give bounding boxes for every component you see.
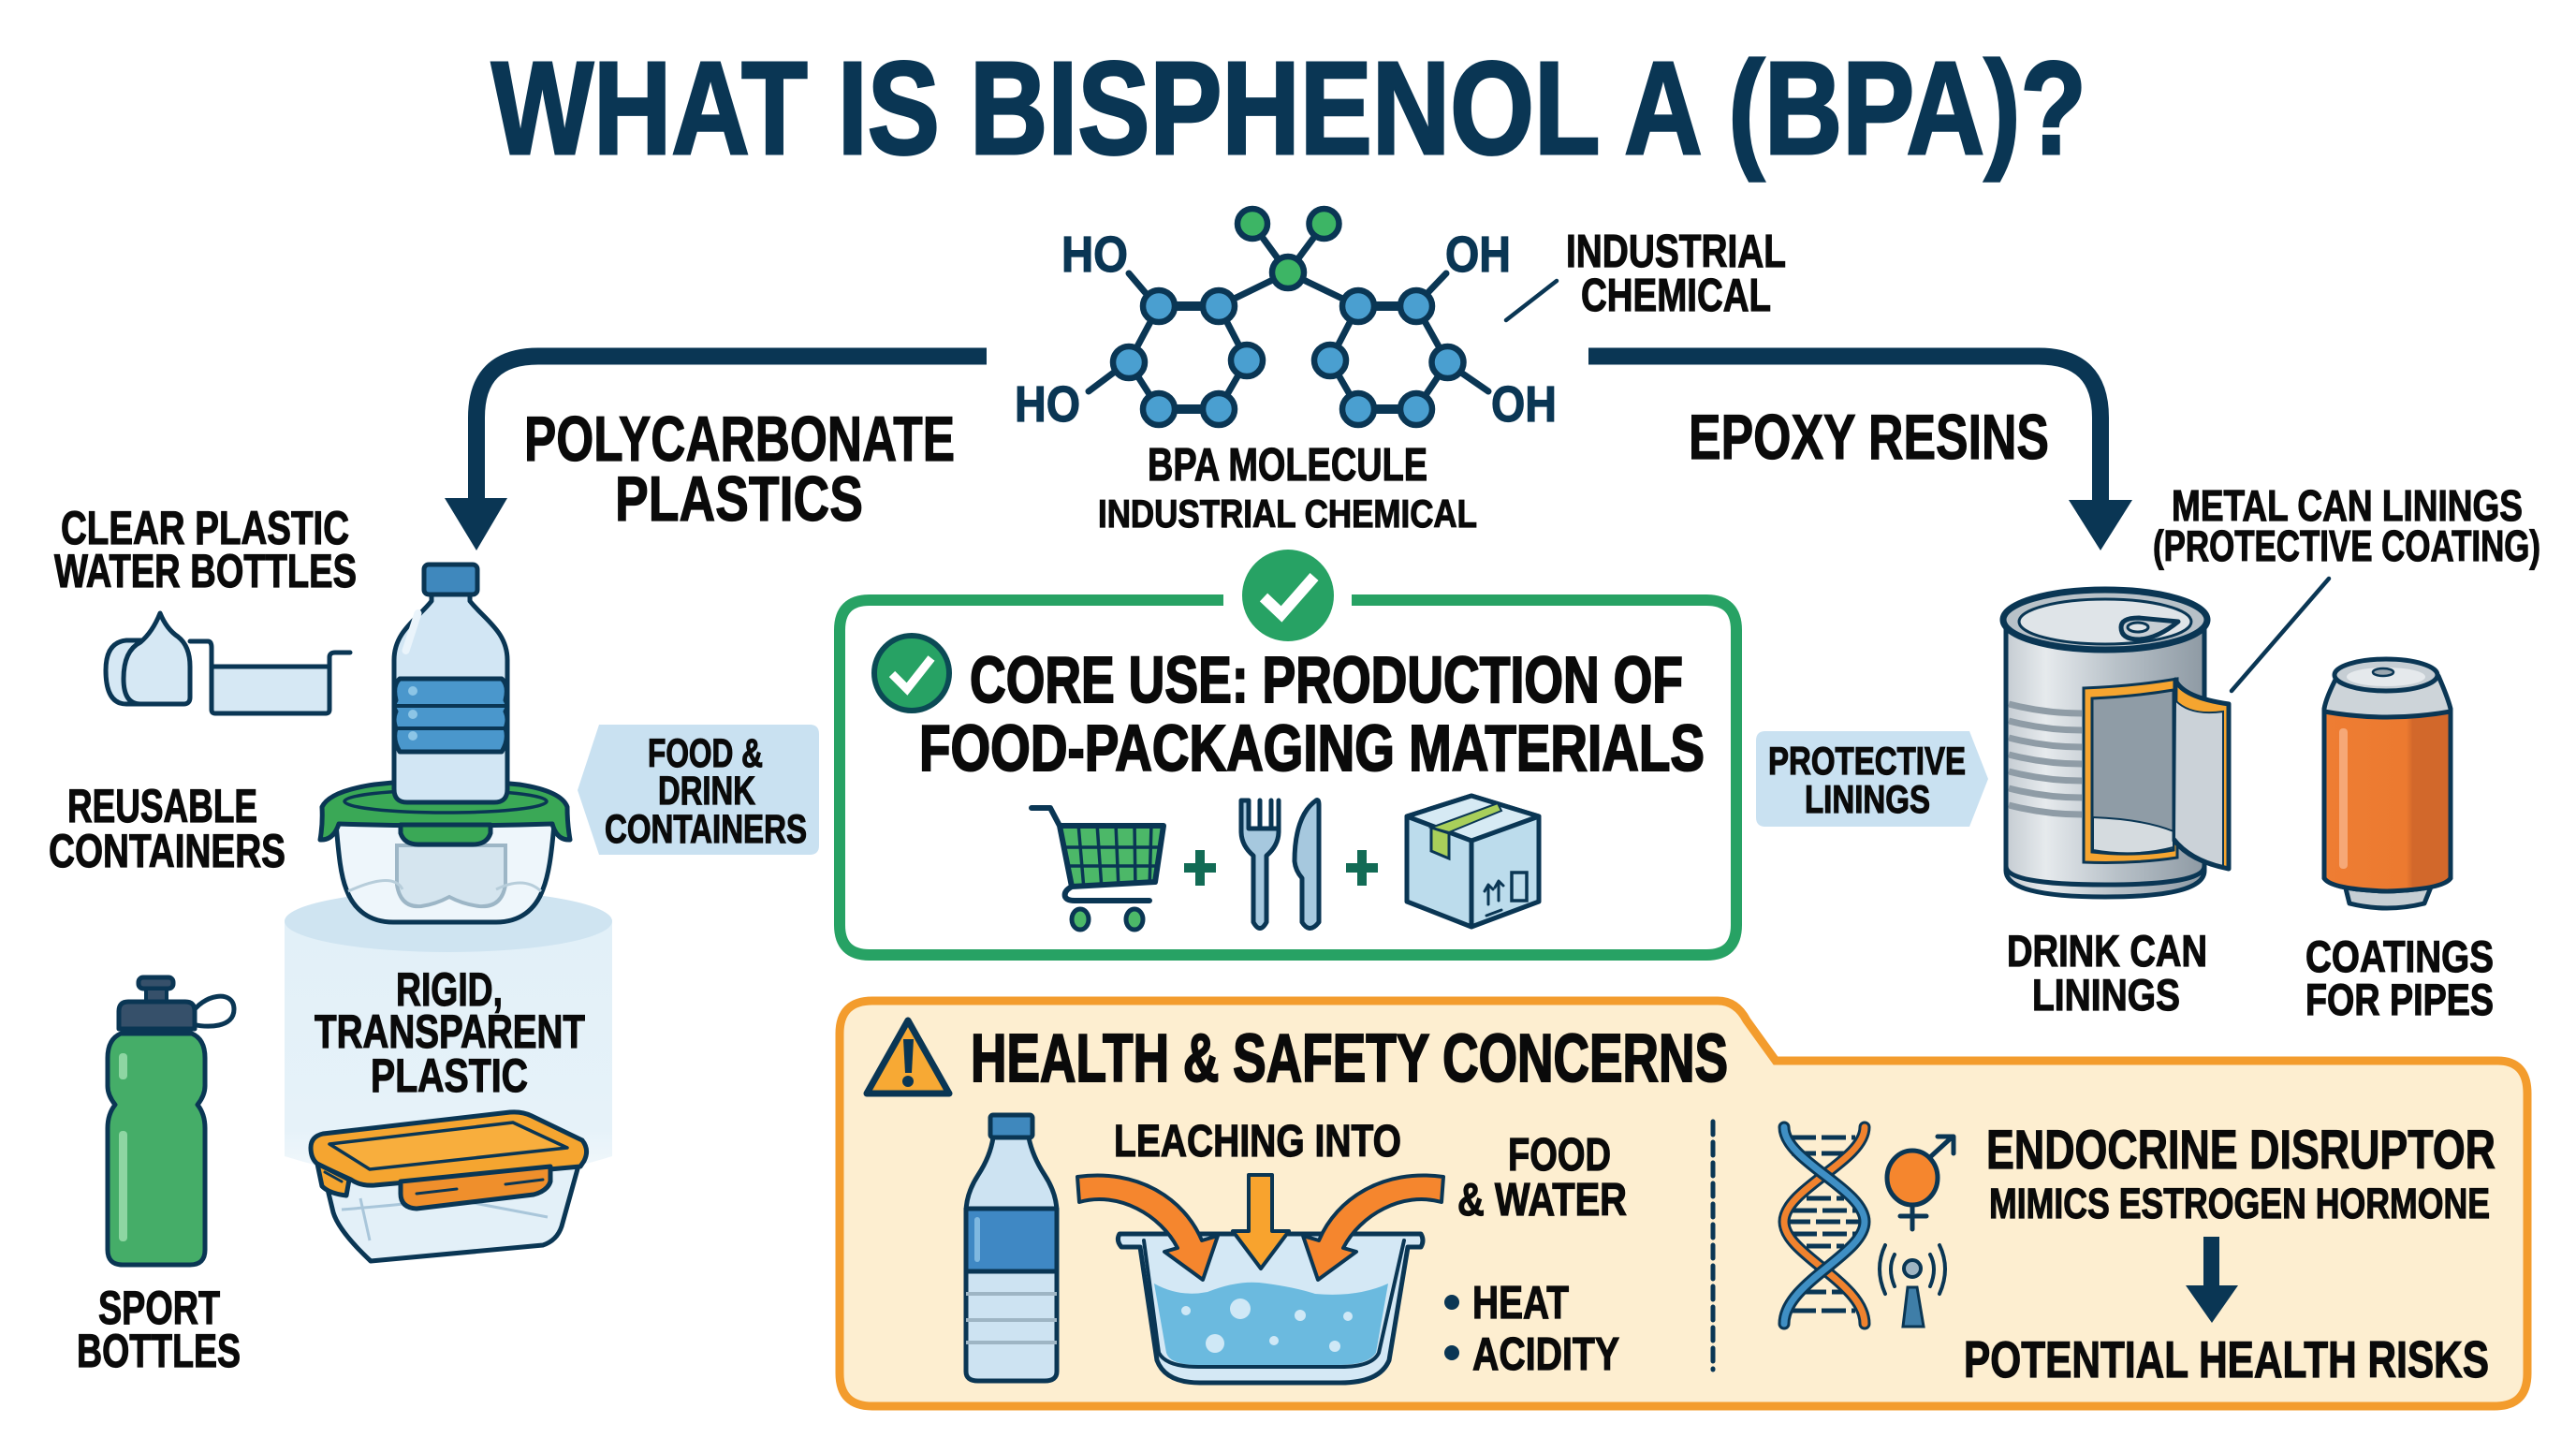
label: coatings for pipes: FOR PIPES — [2305, 975, 2494, 1024]
label: rigid transparent plastic: RIGID, — [396, 963, 503, 1016]
panel: health and safety concerns — [840, 1001, 2527, 1406]
tag: food and drink containers: CONTAINERS — [605, 807, 807, 852]
icon: DNA helix — [1784, 1127, 1865, 1324]
BPA molecule diagram: OH — [1491, 376, 1557, 433]
icon: green lid container — [320, 781, 570, 922]
heading: polycarbonate plastics: PLASTICS — [615, 463, 863, 535]
label: coatings for pipes: COATINGS — [2305, 932, 2494, 981]
icon: knife — [1295, 800, 1319, 929]
heading: polycarbonate plastics: POLYCARBONATE — [524, 404, 955, 475]
label: food and water — [1457, 1130, 1627, 1225]
callout: industrial chemical: CHEMICAL — [1581, 271, 1771, 321]
BPA molecule diagram: OH — [1445, 227, 1511, 283]
tag: food and drink containers — [578, 725, 819, 855]
icon: plus — [1184, 850, 1216, 886]
arrow: to epoxy resins — [1588, 356, 2132, 550]
icon: gender hormone symbol — [1887, 1137, 1954, 1229]
heading: core use — [919, 643, 1705, 785]
heading: core use: CORE USE: PRODUCTION OF — [970, 643, 1683, 716]
label: sport bottles: SPORT — [98, 1282, 220, 1334]
heading: health and safety concerns: HEALTH & SAFETY CONCERNS — [971, 1021, 1728, 1096]
icon: opened metal can — [2003, 590, 2229, 897]
label: clear plastic water bottles: WATER BOTTLES — [54, 545, 357, 597]
heading: core use: FOOD-PACKAGING MATERIALS — [919, 712, 1705, 785]
label: leaching into: LEACHING INTO — [1114, 1117, 1401, 1167]
tag: protective linings: LININGS — [1805, 777, 1930, 821]
callout: industrial chemical: INDUSTRIAL — [1566, 227, 1786, 277]
icon: sport bottle — [108, 977, 234, 1265]
heading: epoxy resins: EPOXY RESINS — [1689, 402, 2049, 473]
label: food and water: FOOD — [1508, 1130, 1611, 1181]
list: heat and acidity: ACIDITY — [1472, 1329, 1619, 1380]
label: reusable containers: CONTAINERS — [49, 825, 285, 877]
label: drink can linings: LININGS — [2032, 970, 2180, 1020]
label: drink can linings: DRINK CAN — [2007, 926, 2207, 976]
BPA molecule diagram — [1015, 209, 1557, 433]
title: WHAT IS BISPHENOL A (BPA)? — [491, 34, 2086, 182]
icon: warning triangle — [867, 1020, 949, 1093]
molecule caption: BPA MOLECULE — [1148, 440, 1427, 491]
list: heat and acidity — [1444, 1278, 1619, 1380]
tag: food and drink containers: DRINK — [658, 769, 755, 814]
label: drink can linings — [2007, 926, 2207, 1020]
label: sport bottles: BOTTLES — [77, 1325, 241, 1377]
label: rigid transparent plastic: PLASTIC — [371, 1049, 528, 1102]
translucent plastic cylinder — [285, 890, 612, 1181]
label: reusable containers — [49, 780, 285, 877]
panel: core use — [840, 550, 1736, 955]
callout: industrial chemical — [1506, 227, 1786, 321]
label: sport bottles — [77, 1282, 241, 1377]
tag: food and drink containers: FOOD & — [648, 731, 763, 776]
arrow: to polycarbonate plastics — [445, 356, 987, 550]
icon: orange drink can — [2324, 659, 2451, 908]
icon: leaching bottle — [966, 1115, 1057, 1381]
icon: bowl of water with arrows — [1077, 1175, 1443, 1383]
label: clear plastic water bottles — [54, 502, 357, 597]
molecule caption: INDUSTRIAL CHEMICAL — [1098, 492, 1477, 536]
label: rigid transparent plastic: TRANSPARENT — [315, 1005, 585, 1058]
arrow: to health risks — [2186, 1237, 2238, 1323]
label: clear plastic water bottles: CLEAR PLASTIC — [61, 502, 349, 554]
icon: top check badge — [1242, 550, 1334, 641]
molecule caption — [1098, 440, 1477, 536]
icon: clear water bottle — [394, 565, 507, 802]
icon: fork — [1241, 800, 1279, 929]
icon: orange lid container — [311, 1112, 587, 1261]
label: reusable containers: REUSABLE — [67, 780, 257, 832]
label: food and water: & WATER — [1457, 1175, 1627, 1225]
BPA molecule diagram: HO — [1015, 376, 1080, 433]
icon: small clear bottle and tray — [106, 613, 350, 713]
BPA molecule diagram: HO — [1061, 227, 1128, 283]
label: coatings for pipes — [2305, 932, 2494, 1024]
label: rigid transparent plastic — [315, 963, 585, 1102]
icon: signal tower — [1880, 1245, 1945, 1327]
icon: plus — [1346, 850, 1378, 886]
callout: metal can linings — [2153, 481, 2540, 691]
tag: protective linings — [1756, 731, 1988, 827]
icon: shopping cart — [1032, 808, 1165, 930]
icon: heading check badge — [874, 636, 949, 711]
list: heat and acidity: HEAT — [1472, 1278, 1569, 1328]
heading: polycarbonate plastics — [524, 404, 955, 535]
icon: cardboard box — [1407, 796, 1539, 927]
tag: protective linings: PROTECTIVE — [1768, 739, 1966, 783]
